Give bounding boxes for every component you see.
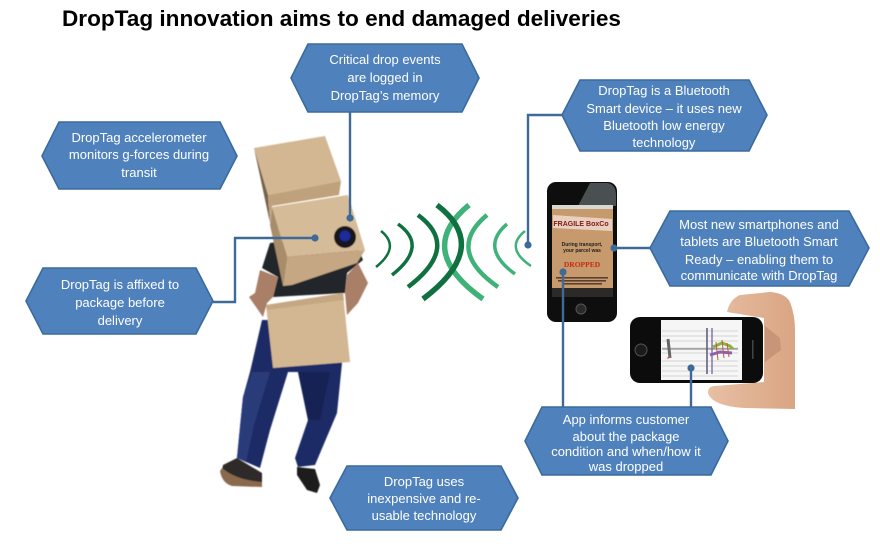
callout: accelerometer: DropTag accelerometer [71, 130, 207, 145]
callout: Bluetooth Smart Ready: Most new smartphones and [679, 217, 839, 232]
icon: smartphone showing DROPPED alert: your parcel was [563, 248, 601, 254]
callout: inexpensive technology [330, 466, 518, 530]
callout: app informs customer: App informs customer [563, 412, 690, 427]
callout: accelerometer: transit [121, 165, 157, 180]
box: middle with DropTag [270, 195, 365, 286]
connector: app to graph [687, 364, 695, 407]
callout: app informs customer: about the package [573, 429, 679, 444]
connector: Bluetooth device to signal [524, 115, 562, 249]
callout: drop events: Critical drop events [329, 52, 441, 67]
graph screen [661, 320, 742, 380]
icon: wireless signal arcs [376, 205, 531, 299]
callout: app informs customer: condition and when/how it [551, 444, 701, 459]
arms [249, 270, 278, 317]
left shoe [222, 458, 262, 484]
callout: Bluetooth Smart Ready [650, 211, 869, 286]
right shoe [297, 467, 320, 493]
callout: drop events: are logged in [347, 70, 423, 85]
callout: Bluetooth Smart Ready: communicate with DropTag [681, 268, 837, 283]
DropTag device [334, 226, 356, 248]
connector: memory to box [346, 112, 354, 222]
callout: affixed: package before [75, 295, 165, 310]
box: top [254, 136, 341, 223]
callout: Bluetooth Smart Ready: tablets are Bluetooth Smart [680, 234, 838, 249]
title: DropTag innovation aims to end damaged deliveries [62, 6, 621, 31]
callout: drop events: DropTag’s memory [331, 88, 440, 103]
icon: smartphone showing DROPPED alert [547, 182, 617, 322]
callout: accelerometer: monitors g-forces during [69, 147, 209, 162]
callout: Bluetooth Smart device: Smart device – it uses new [586, 101, 742, 116]
callout: Bluetooth Smart device: DropTag is a Bluetooth [598, 83, 730, 98]
callout: accelerometer [42, 122, 237, 189]
callout: inexpensive technology: inexpensive and re- [367, 491, 481, 506]
hand [708, 292, 795, 409]
callout: inexpensive technology: usable technology [372, 508, 477, 523]
icon: smartphone showing DROPPED alert: During transport, [562, 242, 603, 248]
connector: affixed to box [213, 234, 319, 302]
callout: Bluetooth Smart device [562, 80, 767, 151]
illustration: man carrying boxes [220, 136, 368, 493]
callout: app informs customer [525, 407, 728, 475]
callout: Bluetooth Smart device: technology [633, 135, 696, 150]
icon: smartphone showing DROPPED alert: DROPPED [564, 260, 601, 269]
illustration: hand holding phone with graph [630, 292, 795, 409]
callout: Bluetooth Smart device: Bluetooth low energy [603, 118, 725, 133]
callout: affixed [26, 268, 213, 334]
callout: app informs customer: was dropped [588, 459, 663, 474]
callout: affixed: DropTag is affixed to [61, 277, 179, 292]
callout: inexpensive technology: DropTag uses [384, 474, 465, 489]
connector: smartphones to phone [610, 244, 650, 252]
legs [237, 320, 342, 468]
icon: smartphone showing DROPPED alert: FRAGILE BoxCo [553, 221, 609, 228]
box: bottom [266, 293, 350, 368]
callout: drop events [291, 44, 479, 112]
callout: affixed: delivery [98, 313, 143, 328]
callout: Bluetooth Smart Ready: Ready – enabling them to [685, 252, 833, 267]
phone [630, 317, 763, 383]
connector: app to phone [559, 268, 567, 407]
torso [262, 232, 363, 297]
